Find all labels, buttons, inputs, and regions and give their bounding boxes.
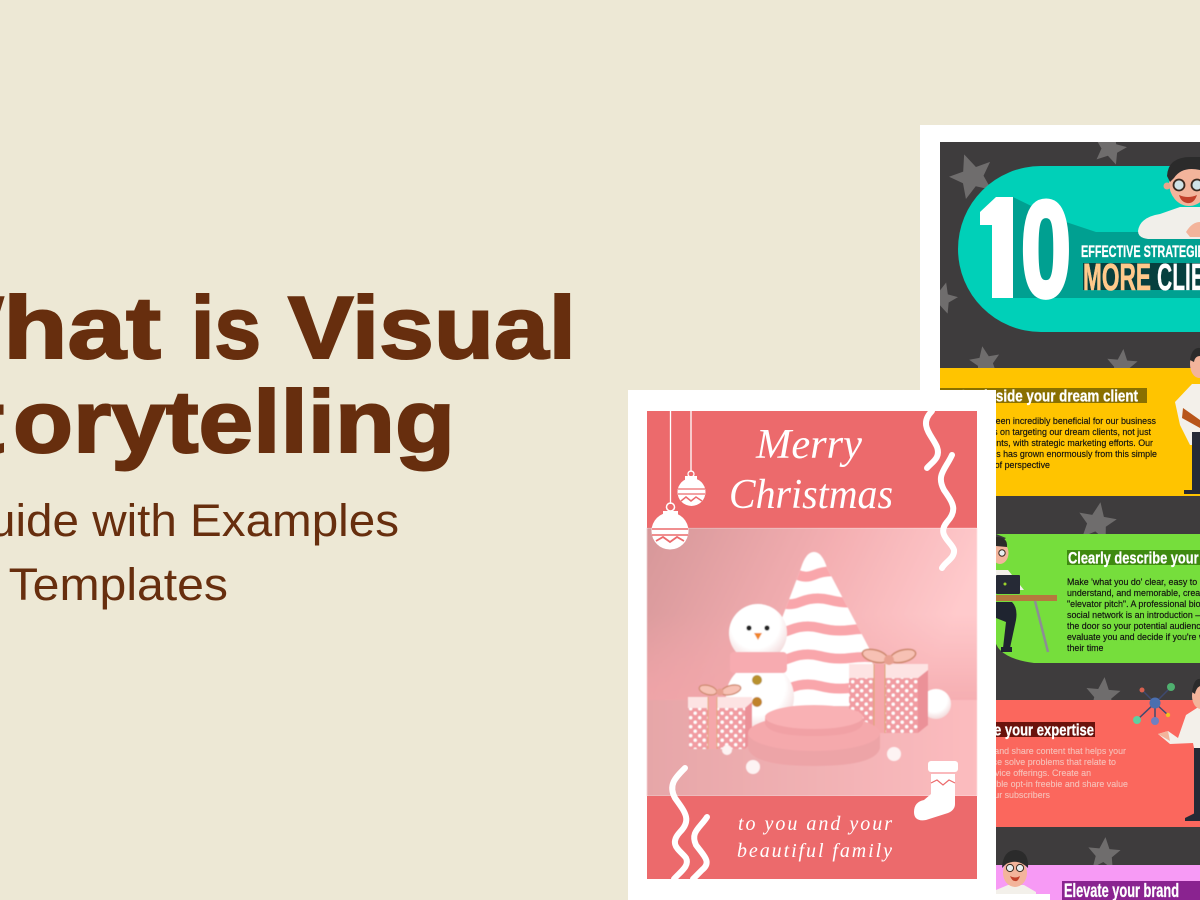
tree [780, 552, 873, 707]
step body: change of perspective [963, 460, 1050, 470]
photo: snowman scene [647, 528, 977, 796]
decorative squiggles [672, 411, 954, 879]
subtitle: uide with Examples [0, 495, 399, 546]
snow balls [722, 745, 901, 774]
icon: network [1133, 683, 1175, 725]
stars [940, 142, 1138, 865]
podium [748, 705, 880, 766]
panel: client strategies poster [920, 125, 1200, 900]
step body [963, 416, 1157, 470]
big number 10: 0 [1021, 173, 1071, 325]
greeting: to you and your beautiful family: to you and your [738, 813, 892, 835]
step body: irresistible opt-in freebie and share value [968, 779, 1128, 789]
step body: It has been incredibly beneficial for our business [967, 416, 1157, 426]
step body [1067, 577, 1200, 653]
panel: step 1 yellow [940, 348, 1200, 496]
greeting: Merry Christmas: Merry [755, 422, 862, 468]
step heading: Get inside your dream client [958, 386, 1138, 406]
big number 10 [980, 197, 1069, 300]
step heading [940, 720, 1095, 740]
subtitle [0, 495, 399, 610]
icon: hanging ornaments [652, 411, 706, 550]
step heading: Share your expertise [965, 720, 1094, 740]
title: Visual [288, 278, 576, 377]
character: presenter [1158, 679, 1200, 821]
title [0, 278, 576, 471]
panel: step 2 green [990, 534, 1200, 663]
panel: christmas card [628, 390, 996, 900]
teal header pill [958, 157, 1200, 332]
title: orytelling [13, 372, 455, 471]
panel: step 4 pink [996, 850, 1200, 900]
step body: to focus on targeting our dream clients, not just [966, 427, 1152, 437]
step body: Make 'what you do' clear, easy to [1067, 577, 1197, 587]
step body: audience solve problems that relate to [966, 757, 1116, 767]
step body: any clients, with strategic marketing efforts. Our [966, 438, 1153, 448]
step body: Create and share content that helps your [965, 746, 1126, 756]
step body: for your subscribers [972, 790, 1051, 800]
ball behind gift [921, 689, 951, 719]
panel: step 3 red [940, 679, 1200, 827]
character: man at desk [992, 537, 1057, 652]
step body: your service offerings. Create an [963, 768, 1091, 778]
right gift [849, 647, 928, 733]
step body: business has grown enormously from this simple [966, 449, 1157, 459]
character: man with paper [996, 850, 1050, 900]
teal header pill: MORE [1083, 257, 1151, 299]
big number 10: 1 [980, 171, 1016, 328]
bottom band [647, 796, 977, 879]
greeting: Merry Christmas: Christmas [729, 472, 893, 518]
character: top man [1138, 157, 1200, 239]
character: man with folder [1175, 348, 1200, 494]
greeting: Merry Christmas [729, 422, 893, 518]
icon: stocking [914, 761, 958, 820]
greeting: to you and your beautiful family: beautiful family [737, 840, 892, 862]
step body: their time [1067, 643, 1104, 653]
step body [963, 746, 1128, 800]
left gift [688, 683, 752, 749]
snowman [726, 604, 794, 731]
title: is [191, 278, 261, 377]
top band [647, 411, 977, 528]
greeting: to you and your beautiful family [737, 813, 892, 862]
